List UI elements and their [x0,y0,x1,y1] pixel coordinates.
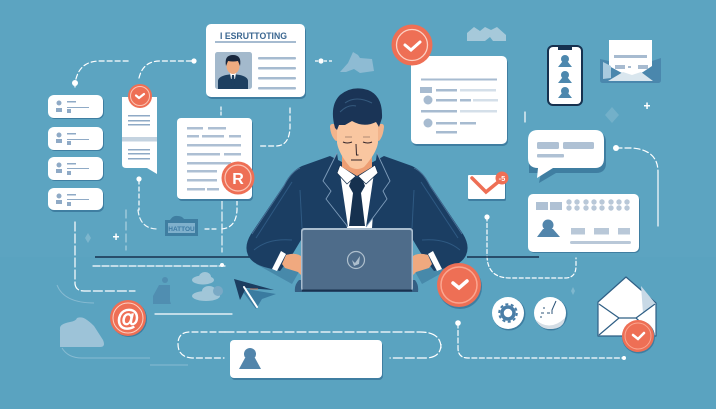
counter badge: -5 [499,174,505,183]
badge: check [622,320,655,354]
laptop [295,228,418,292]
icon: gear [492,297,526,330]
faded background icons [57,27,506,365]
heading: I ESRUTTOTING [220,31,287,41]
neck [342,150,372,176]
connector lines [75,61,658,358]
badge: at sign [110,300,147,337]
badge: R: R [232,171,244,188]
cuffs [272,251,442,271]
icon: large envelope [598,277,656,354]
avatar [239,348,261,369]
icon: faded houses [467,27,506,41]
icon: faded cloud blob [60,317,104,347]
badge: large check [437,263,482,309]
icon: faded person [153,277,171,304]
panel: folded document with check [122,84,157,174]
panel: resume card [206,24,306,99]
list card 3 [48,157,104,181]
ears [330,124,384,141]
icon: phone [547,45,583,106]
panel: chat bubble [528,130,606,183]
list card 1 [48,95,104,119]
icon: paper plane [234,279,276,309]
avatar [537,220,560,237]
badge: check [128,84,152,108]
list card 4 [48,188,104,212]
badge: check [392,24,432,66]
icon: open mail [600,40,661,83]
icon: mail with counter [468,172,508,201]
sparkles [85,102,650,295]
chip: faded label: HATTOU [168,226,195,233]
chip: faded label [165,216,198,236]
shirt and tie [339,170,376,228]
icon: faded clouds [192,272,223,301]
panel: contact list [48,95,104,212]
arcs [57,285,188,365]
list card 2 [48,127,104,151]
icon: faded shapes [340,52,374,73]
lapels [323,153,390,227]
connector nodes [72,58,626,360]
face [337,120,378,169]
dark table line [95,256,539,258]
collar [337,165,378,184]
arm shadow on table [256,258,458,284]
panel: text document with R badge [177,118,254,201]
portrait [215,52,252,89]
hair [333,88,382,130]
badge: at sign: @ [117,305,139,331]
hands [282,254,432,278]
panel: right text card [392,24,508,146]
icon: dial [534,297,568,330]
laptop logo [348,252,364,268]
panel: bottom search card [230,340,383,380]
panel: profile form card [528,194,640,253]
torso and arms [246,156,468,271]
person [246,88,468,284]
